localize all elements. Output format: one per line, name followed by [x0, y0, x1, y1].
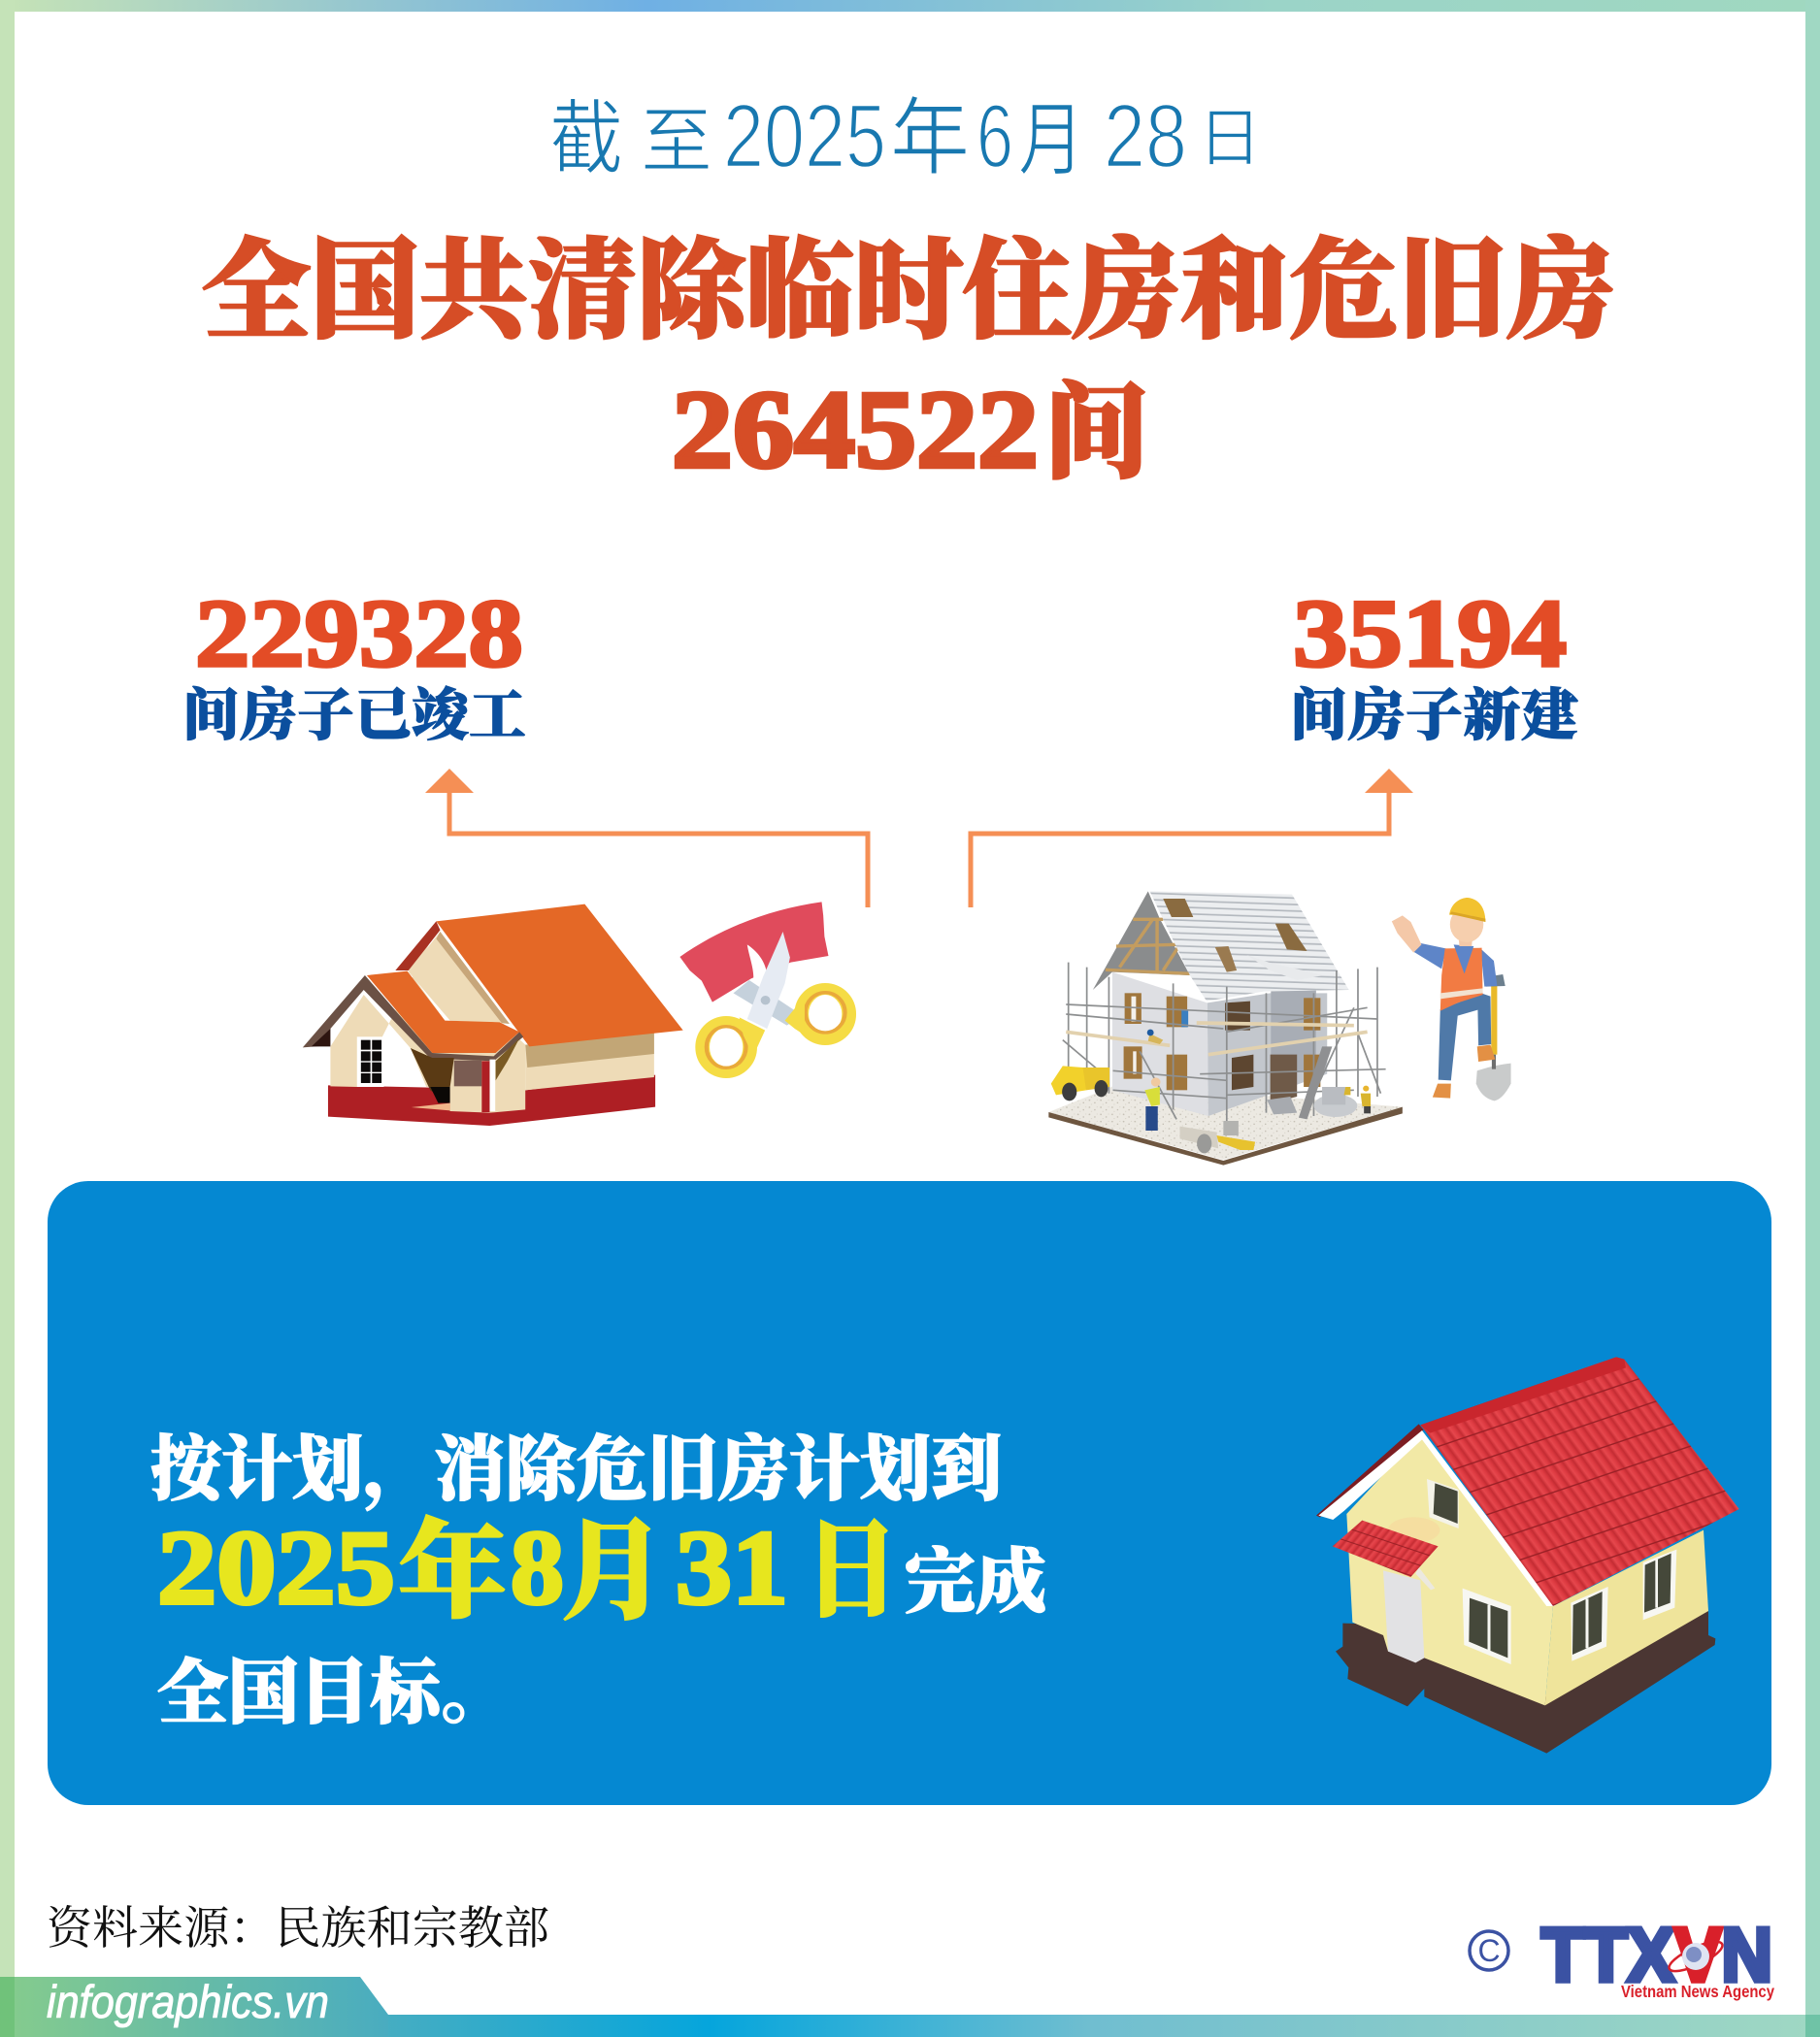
logo: copyright and TTXVN: Vietnam News Agency	[1621, 1982, 1774, 2001]
stat: 35194 new build: 35194	[1293, 579, 1567, 687]
arrow: to new build	[971, 769, 1413, 907]
subtitle: date: 6	[976, 85, 1013, 186]
subtitle: date: 2025	[723, 85, 886, 186]
main figure: 264522 rooms: 264522	[672, 368, 1039, 491]
main figure: 264522 rooms: 间	[1044, 349, 1149, 499]
stat: 35194 new build	[1290, 579, 1578, 751]
panel text: line 2 date highlighted: 8	[511, 1509, 564, 1626]
logo: copyright and TTXVN	[1468, 1925, 1774, 2001]
arrow: to completed	[425, 769, 868, 907]
panel text: line 2 tail: 完成	[905, 1525, 1046, 1626]
subtitle: date: 截	[549, 93, 623, 184]
panel text: line 1: 按计划，消除危旧房计划到	[150, 1412, 1002, 1514]
subtitle: date: 年	[890, 91, 970, 185]
logo: copyright and TTXVN: C	[1477, 1933, 1501, 1968]
icon: house under construction	[1048, 891, 1403, 1166]
source line: 资料来源：民族和宗教部	[47, 1892, 549, 1957]
main title: 全国共清除临时住房和危旧房	[202, 204, 1615, 360]
panel text: line 2 date highlighted: 月	[560, 1484, 666, 1641]
icon: waving worker with shovel	[1392, 898, 1511, 1101]
panel text: line 2 date highlighted: 2025	[157, 1509, 395, 1626]
stat: 229328 completed	[182, 579, 526, 751]
subtitle: date: 日	[1198, 102, 1262, 174]
subtitle: date: 至	[641, 101, 712, 181]
subtitle: date	[549, 85, 1262, 186]
panel text: line 2 date highlighted: 年	[398, 1486, 507, 1639]
panel text: line 3: 全国目标。	[157, 1635, 512, 1737]
stat: 35194 new build: 间房子新建	[1290, 670, 1578, 751]
panel text: line 2 date highlighted	[157, 1484, 898, 1641]
subtitle: date: 月	[1018, 95, 1084, 185]
footer tab: infographics.vn: infographics.vn	[47, 1976, 329, 2027]
stat: 229328 completed: 229328	[195, 579, 523, 687]
panel: target	[48, 1181, 1771, 1805]
panel text: line 2 date highlighted: 31	[676, 1509, 788, 1626]
main figure: 264522 rooms	[672, 349, 1149, 499]
footer tab: infographics.vn	[0, 1976, 388, 2037]
icon: red roof house	[1316, 1357, 1739, 1754]
icon: scissors cutting ribbon	[679, 902, 849, 1072]
logo: copyright and TTXVN: TTXVN	[1541, 1912, 1772, 1997]
subtitle: date: 28	[1104, 85, 1187, 186]
stat: 229328 completed: 间房子已竣工	[182, 670, 526, 751]
icon: orange roof house	[303, 904, 683, 1126]
panel text: line 2 date highlighted: 日	[805, 1485, 898, 1638]
